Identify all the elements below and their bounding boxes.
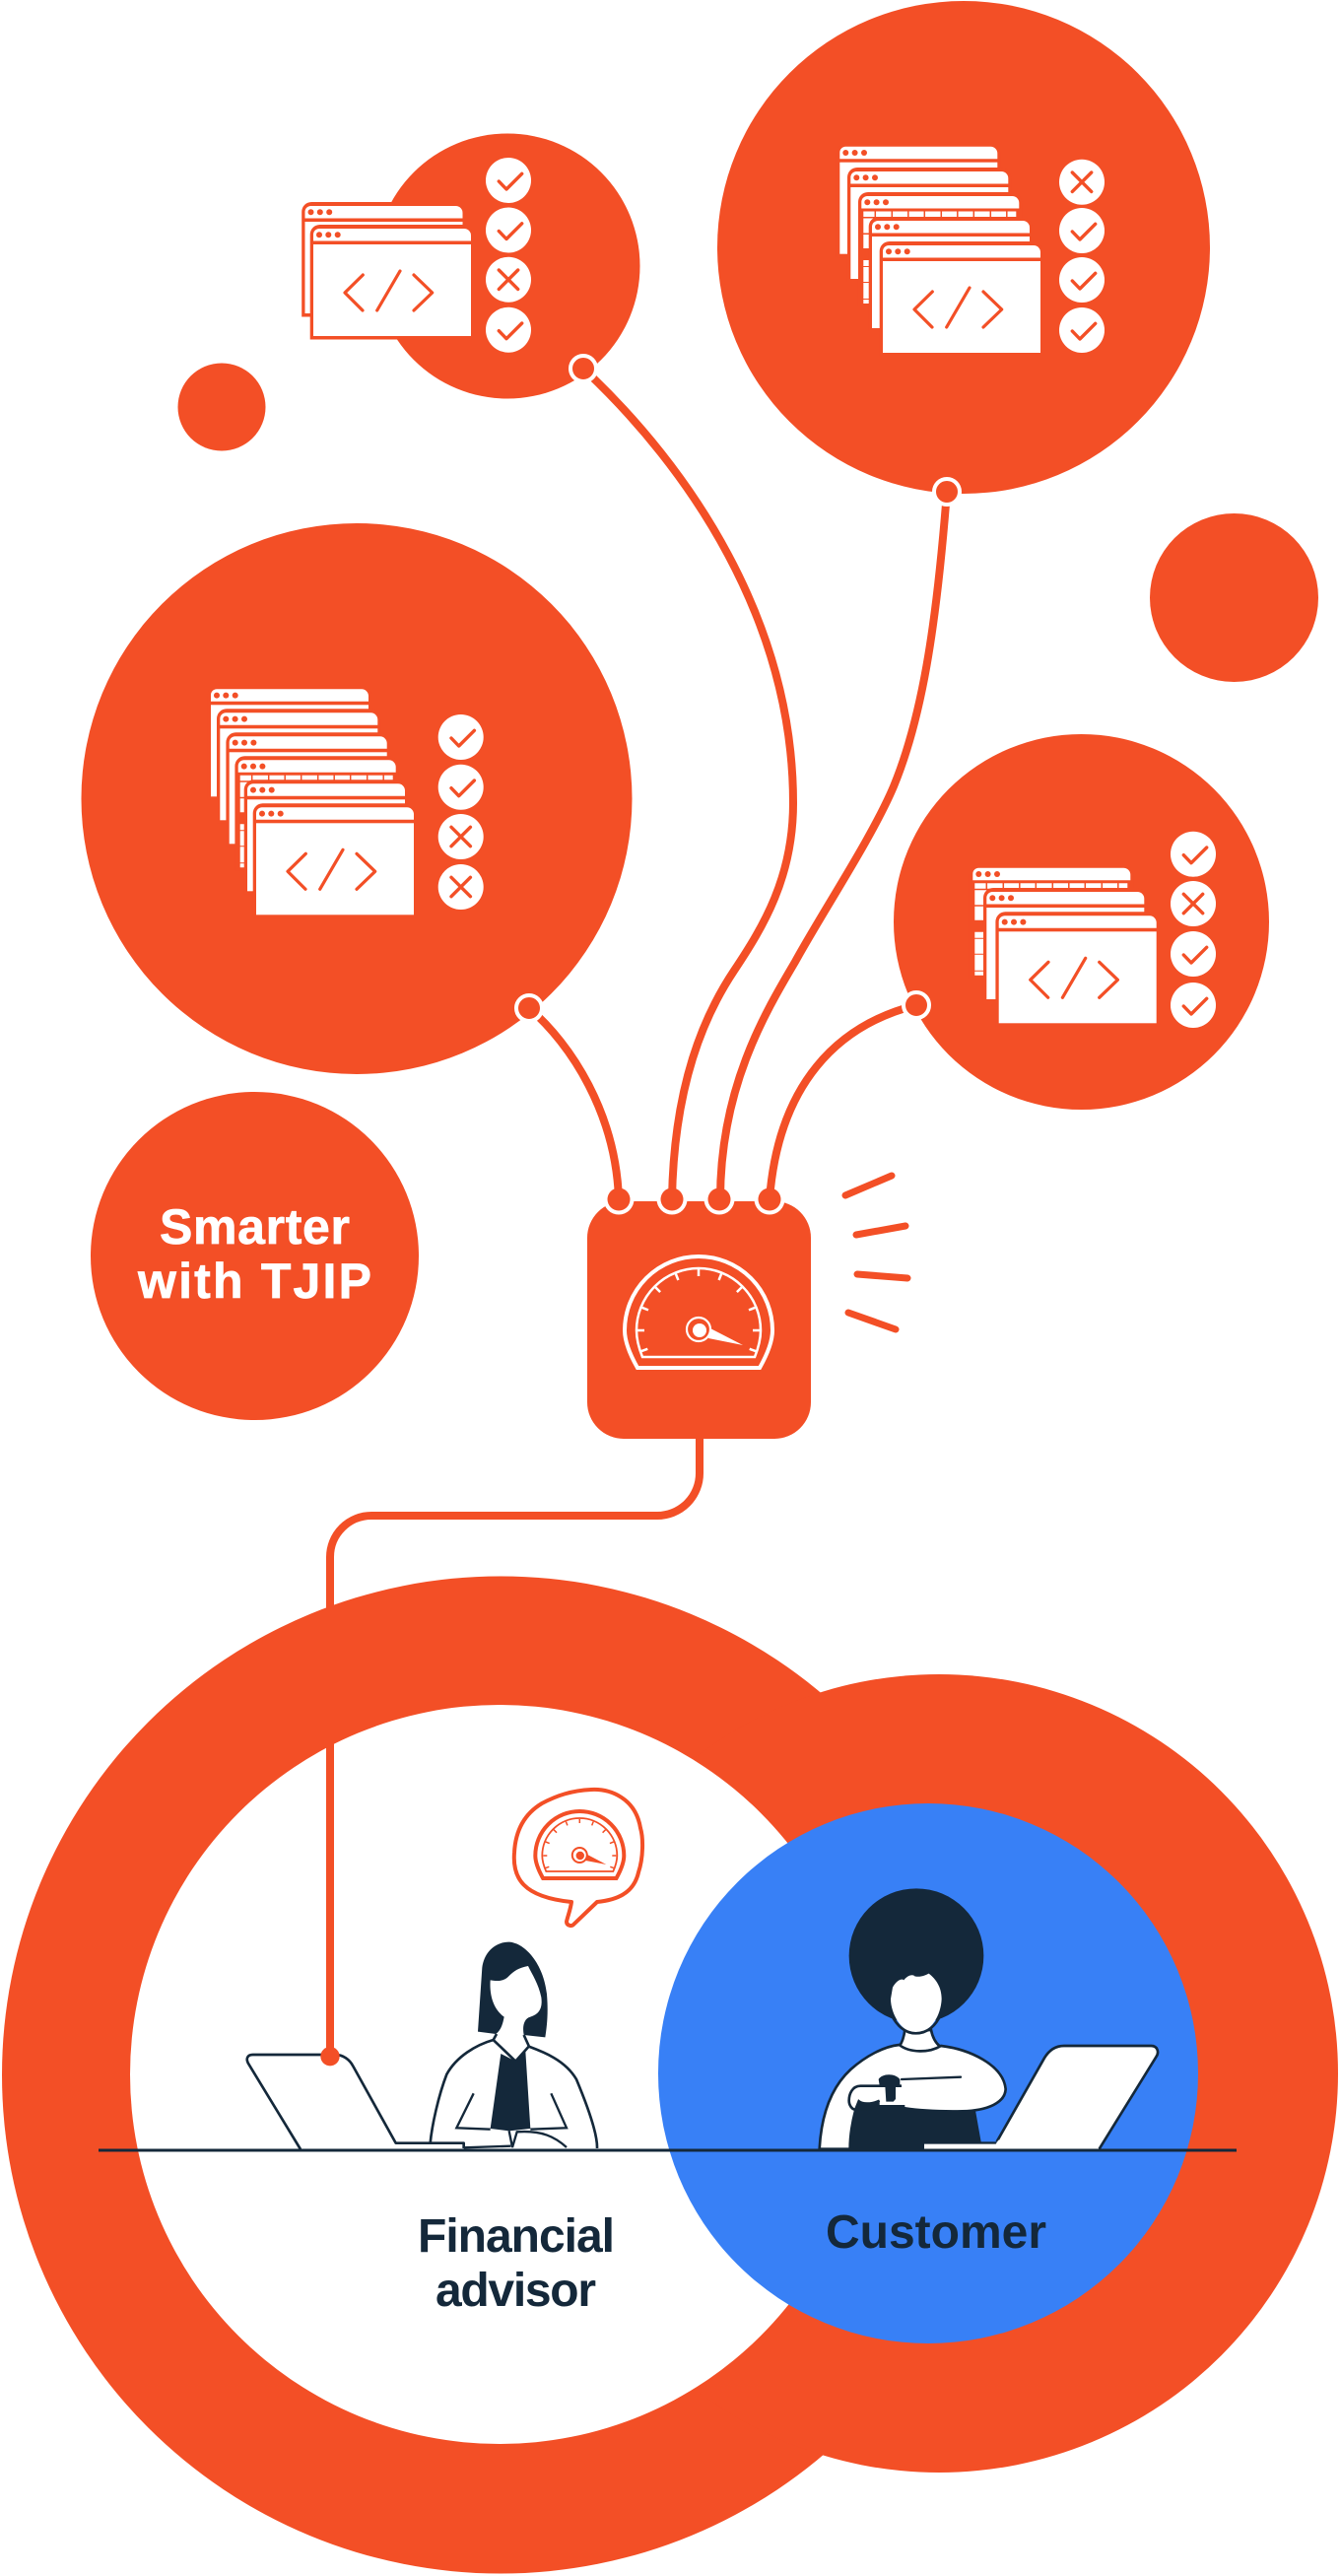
panel: smarter with TJIP badge xyxy=(91,1092,419,1420)
node: hub connection points xyxy=(607,1188,780,1210)
icon: code windows stack xyxy=(970,864,1160,1027)
icon: speedometer xyxy=(625,1256,772,1368)
icon: small speedometer xyxy=(535,1811,624,1878)
illustration: thought bubble with gauge xyxy=(514,1790,642,1926)
panel: right test circle xyxy=(894,734,1269,1110)
icon: code windows stack xyxy=(208,685,417,918)
icon: test results xyxy=(1171,832,1216,1028)
background circle: small dot left xyxy=(177,363,266,451)
panel: speed hub xyxy=(587,1185,811,1439)
panel: top-right test circle xyxy=(717,1,1210,494)
heading: smarter with TJIP: Smarter xyxy=(160,1199,350,1254)
icon: code windows stack xyxy=(837,143,1043,357)
wire: hub to advisor laptop xyxy=(330,1439,700,2057)
label: financial advisor: Financial xyxy=(418,2210,615,2263)
icon: test results xyxy=(486,158,531,353)
icon: speed lines xyxy=(845,1176,907,1329)
icon: code windows stack xyxy=(302,202,474,339)
illustration: advisor laptop xyxy=(247,2047,464,2149)
heading: smarter with TJIP: with TJIP xyxy=(137,1254,371,1309)
icon: test results xyxy=(438,714,484,910)
icon: test results xyxy=(1059,160,1105,353)
panel: bottom overlap circles xyxy=(2,1577,1338,2574)
node: hub connection rings xyxy=(603,1185,784,1214)
background circle: dot right xyxy=(1150,513,1318,682)
panel: top-left test circle xyxy=(302,134,640,398)
label: customer: Customer xyxy=(826,2206,1046,2259)
illustration: customer figure xyxy=(820,1888,1006,2150)
desk line xyxy=(99,2148,1237,2152)
wire: connectors into hub xyxy=(529,369,947,1199)
illustration: financial advisor figure xyxy=(431,1942,597,2148)
illustration: customer laptop xyxy=(924,2046,1158,2150)
label: financial advisor: advisor xyxy=(436,2265,596,2317)
node: circle connection points xyxy=(516,356,960,1021)
panel: left test circle xyxy=(81,523,633,1074)
